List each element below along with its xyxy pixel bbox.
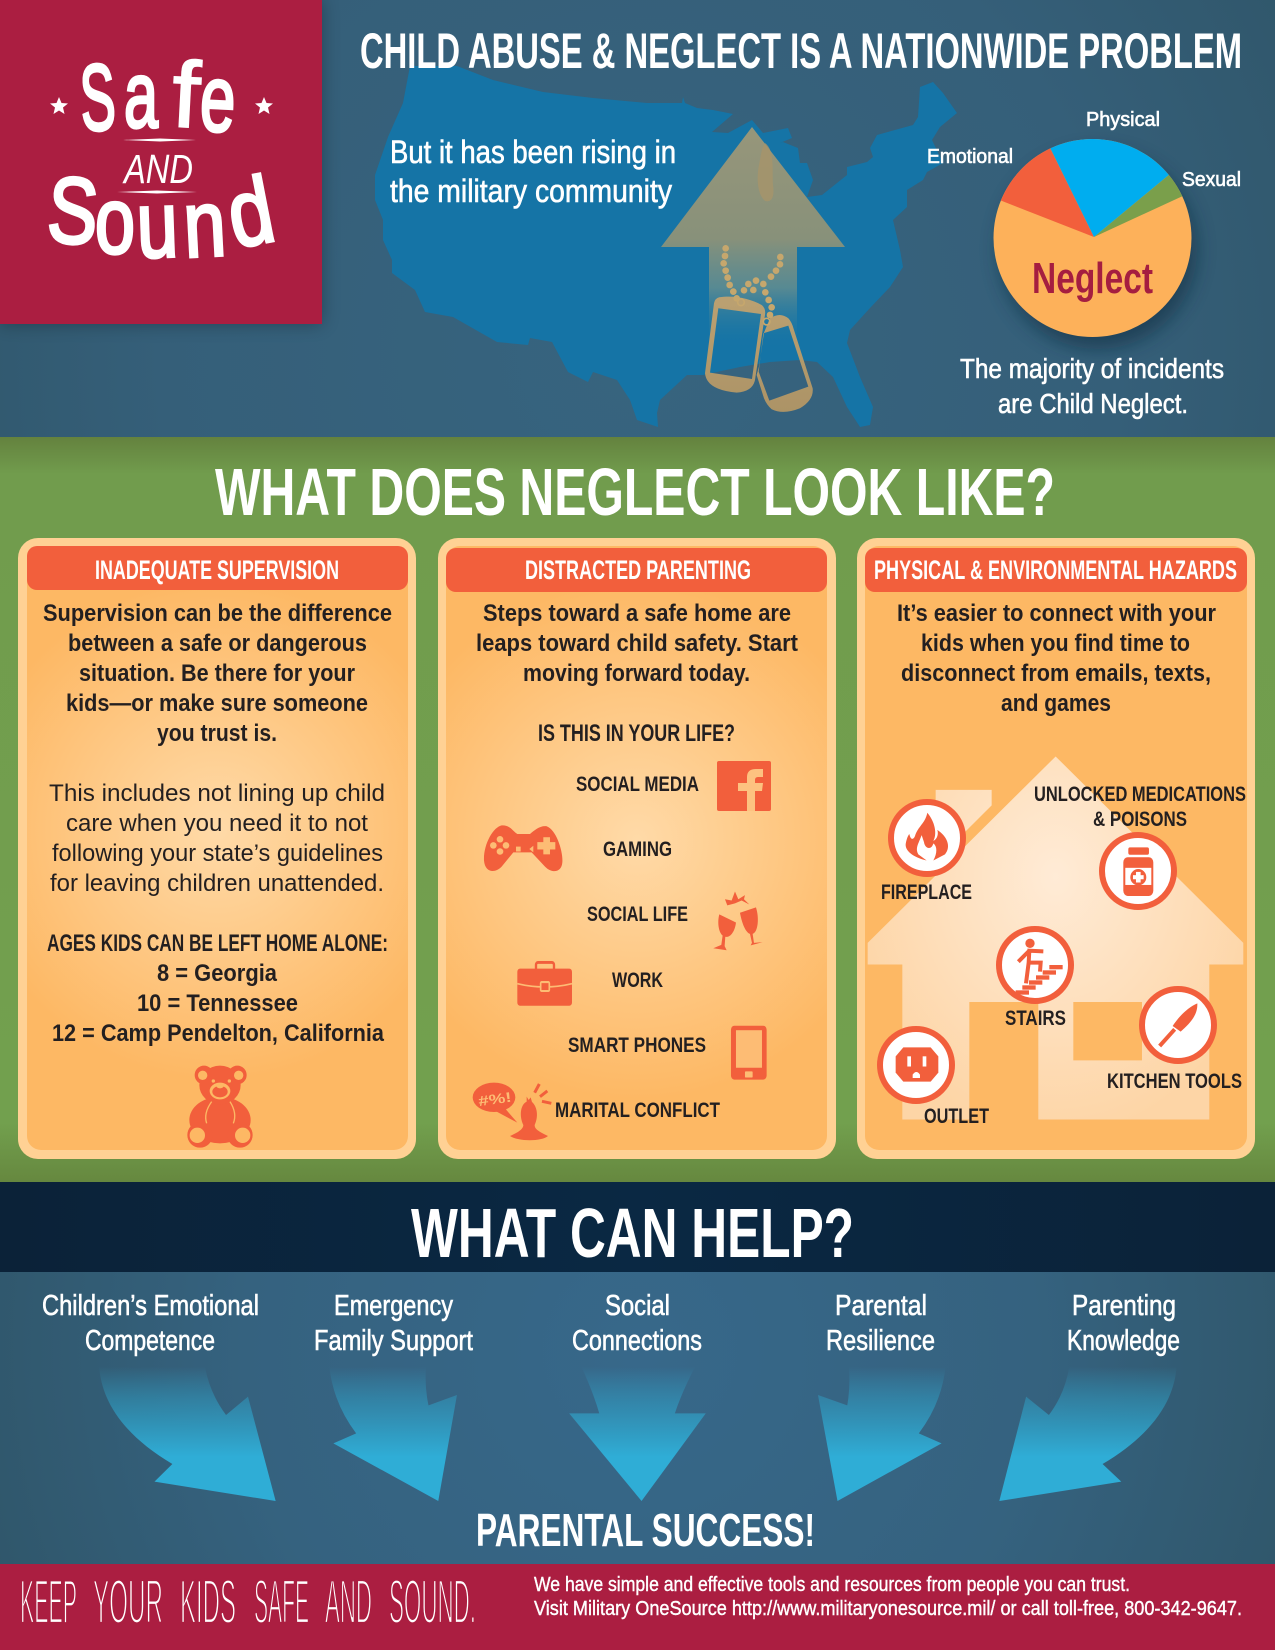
icon: champagne glasses	[713, 891, 763, 950]
label: parenting knowledge: Knowledge	[1067, 1325, 1180, 1357]
label: children's emotional competence: Competence	[85, 1325, 215, 1357]
card header	[27, 546, 408, 590]
label: parental resilience: Resilience	[826, 1325, 935, 1357]
logo word: Sound: S	[44, 156, 102, 265]
text: connect with your kids: It’s easier to connect with your	[897, 600, 1216, 627]
label: emergency family support	[314, 1290, 473, 1357]
text: ages kids can be left home alone: 10 = Tennessee	[137, 990, 298, 1017]
icon: stairs	[999, 929, 1071, 1001]
heading: what can help: WHAT CAN HELP?	[411, 1194, 854, 1272]
text: steps toward a safe home	[476, 600, 798, 687]
text: majority of incidents	[960, 353, 1224, 419]
icon: marital conflict	[473, 1083, 551, 1140]
logo word: AND: AND	[122, 146, 193, 192]
label: social connections: Connections	[572, 1325, 702, 1357]
card header	[446, 548, 827, 592]
arrow: rising rate	[661, 127, 845, 352]
text: supervision intro: situation. Be there for your	[79, 660, 355, 687]
label: social media: SOCIAL MEDIA	[576, 772, 699, 796]
text: steps toward a safe home: moving forward today.	[523, 660, 750, 687]
text: child care explanation: care when you need it to not	[66, 810, 368, 837]
icon: game controller	[484, 825, 562, 871]
panel: what can help band	[0, 1182, 1275, 1272]
illustration: house	[868, 756, 1243, 1120]
heading: parental success: PARENTAL SUCCESS!	[476, 1504, 815, 1556]
chart: pie of incident types	[927, 90, 1241, 350]
label: emergency family support: Emergency	[334, 1290, 453, 1322]
footer contact text	[534, 1574, 1242, 1620]
text: child care explanation: for leaving children unattended.	[50, 870, 384, 897]
panel: footer	[0, 1564, 1275, 1650]
icon: medication bottle	[1102, 835, 1174, 907]
logo stars	[50, 97, 273, 114]
panel: distracted parenting	[438, 538, 836, 1159]
text: child care explanation: This includes not lining up child	[49, 780, 385, 807]
arrows: converging on parental success	[99, 1367, 1177, 1501]
text: ages kids can be left home alone: 8 = Georgia	[157, 960, 277, 987]
footer slogan: AND	[325, 1568, 372, 1637]
footer slogan: KIDS	[180, 1568, 236, 1637]
text: is this in your life: IS THIS IN YOUR LIFE?	[538, 720, 735, 747]
label: outlet: OUTLET	[924, 1104, 989, 1128]
panel: neglect background	[0, 437, 1275, 1182]
card header: DISTRACTED PARENTING	[525, 555, 751, 585]
panel: footer: SOUND.	[389, 1568, 476, 1637]
text: supervision intro: Supervision can be the difference	[43, 600, 392, 627]
icon: facebook	[717, 761, 771, 811]
icon: teddy bear	[187, 1066, 253, 1148]
label: social connections	[572, 1290, 702, 1357]
label: parental resilience	[826, 1290, 935, 1357]
logo word: Sound	[44, 156, 282, 278]
card header: INADEQUATE SUPERVISION	[95, 555, 339, 585]
footer slogan: SAFE	[254, 1568, 309, 1637]
footer slogan	[20, 1568, 476, 1637]
logo word: Sound: n	[181, 170, 228, 277]
card header	[865, 548, 1247, 592]
panel: inadequate supervision	[18, 538, 416, 1159]
text: steps toward a safe home: leaps toward child safety. Start	[476, 630, 798, 657]
text: supervision intro: kids—or make sure someone	[66, 690, 368, 717]
text: rising in the military community: the military community	[390, 173, 672, 209]
label: children's emotional competence: Children’s Emotional	[42, 1290, 259, 1322]
logo word: Safe: f	[169, 41, 204, 148]
text: rising in the military community	[390, 134, 676, 209]
pie label: Physical: Physical	[1086, 109, 1160, 131]
text: ages kids can be left home alone: AGES KIDS CAN BE LEFT HOME ALONE:	[47, 930, 388, 957]
label: parenting knowledge: Parenting	[1072, 1290, 1176, 1322]
panel: nationwide problem background	[0, 0, 1275, 437]
label: emergency family support: Family Support	[314, 1325, 473, 1357]
label: stairs: STAIRS	[1005, 1006, 1066, 1030]
text: supervision intro: you trust is.	[157, 720, 277, 747]
text: supervision intro: between a safe or dangerous	[68, 630, 367, 657]
pie label: Neglect: Neglect	[1032, 254, 1153, 303]
panel: protective factors background	[0, 1272, 1275, 1564]
text: connect with your kids: kids when you find time to	[921, 630, 1190, 657]
pie label: Emotional: Emotional	[927, 146, 1013, 168]
logo word: Sound: o	[95, 168, 135, 273]
logo word: Sound: d	[219, 156, 282, 268]
logo word: Safe	[77, 41, 238, 152]
panel: logo	[0, 0, 322, 324]
map of the United States	[375, 66, 957, 427]
footer slogan: YOUR	[93, 1568, 163, 1637]
icon: marital conflict: #%!	[477, 1089, 513, 1109]
text: steps toward a safe home: Steps toward a safe home are	[483, 600, 791, 627]
text: connect with your kids: and games	[1001, 690, 1111, 717]
label: social life: SOCIAL LIFE	[587, 902, 688, 926]
icon: dog tags	[705, 245, 813, 412]
label: marital conflict: MARITAL CONFLICT	[555, 1098, 720, 1122]
footer contact text: We have simple and effective tools and resources from people you can trust.	[534, 1574, 1130, 1596]
label: parental resilience: Parental	[835, 1290, 927, 1322]
text: ages kids can be left home alone	[47, 930, 388, 1047]
icon: fireplace	[891, 802, 963, 874]
text: child care explanation	[49, 780, 385, 897]
logo word: Sound: u	[135, 171, 180, 278]
icon: briefcase	[517, 962, 572, 1006]
logo word: Safe: a	[124, 42, 158, 147]
label: social connections: Social	[605, 1290, 670, 1322]
label: gaming: GAMING	[603, 837, 672, 861]
text: ages kids can be left home alone: 12 = Camp Pendelton, California	[52, 1020, 384, 1047]
icon: outlet	[880, 1029, 952, 1101]
icon: smart phone	[731, 1026, 767, 1080]
footer slogan: KEEP	[20, 1568, 77, 1637]
text: supervision intro	[43, 600, 392, 747]
text: majority of incidents: are Child Neglect.	[998, 388, 1188, 419]
label: unlocked medications and poisons: & POISONS	[1093, 807, 1187, 831]
label: smart phones: SMART PHONES	[568, 1033, 706, 1057]
text: connect with your kids: disconnect from emails, texts,	[901, 660, 1211, 687]
logo word: Safe: S	[77, 44, 118, 151]
text: rising in the military community: But it has been rising in	[390, 134, 676, 170]
text: child care explanation: following your state’s guidelines	[52, 840, 383, 867]
text: connect with your kids	[897, 600, 1216, 717]
pie label: Sexual: Sexual	[1182, 169, 1241, 191]
label: fireplace: FIREPLACE	[881, 880, 972, 904]
logo rules	[117, 138, 197, 194]
label: parenting knowledge	[1067, 1290, 1180, 1357]
icon: kitchen knife	[1142, 989, 1214, 1061]
logo word: Safe: e	[198, 45, 238, 152]
label: unlocked medications and poisons	[1034, 782, 1246, 831]
label: work: WORK	[612, 968, 663, 992]
icon: lake michigan tint	[758, 143, 773, 201]
label: children's emotional competence	[42, 1290, 259, 1357]
panel: physical and environmental hazards	[857, 538, 1255, 1159]
text: majority of incidents: The majority of incidents	[960, 353, 1224, 384]
